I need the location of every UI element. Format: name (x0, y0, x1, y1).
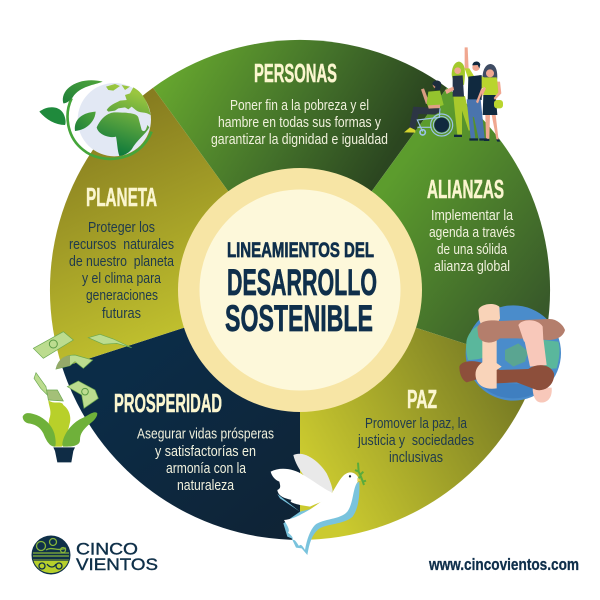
section: Prosperidad (114, 388, 274, 494)
plant right leaf (62, 412, 97, 447)
hand: medium brown arm and fist (477, 319, 565, 343)
wheel: Alianzas wedge (300, 88, 550, 367)
text: Alianzas: agenda a través (429, 225, 515, 241)
dove eye (349, 475, 351, 477)
text: Paz: Promover la paz, la (365, 416, 468, 432)
logo mark (32, 536, 70, 574)
center disc (200, 190, 400, 390)
dove wing (271, 469, 333, 507)
money details (49, 340, 88, 395)
section: Planeta (69, 182, 175, 322)
logo: Cinco Vientos (32, 536, 158, 574)
plant pot (53, 447, 75, 462)
text: Alianzas: de una sólida (437, 242, 508, 258)
text: Planeta: futuras (102, 306, 141, 322)
dove back wing (293, 454, 333, 497)
text: Alianzas: alianza global (434, 259, 510, 275)
leaf: small (75, 112, 96, 131)
text: Paz (357, 416, 474, 466)
section: Personas (211, 58, 388, 148)
text: Planeta: de nuestro planeta (69, 254, 175, 270)
dove body (284, 472, 359, 550)
title: SOSTENIBLE (225, 298, 373, 339)
text: Planeta: Proteger los (88, 220, 155, 236)
title: DESARROLLO (227, 262, 377, 303)
person: man raising arm (465, 47, 487, 141)
hand: pale fist (476, 358, 502, 389)
icon: joined hands over globe (459, 304, 565, 402)
text: Paz: justicia y sociedades (357, 433, 474, 449)
text: Alianzas: Implementar la (431, 208, 514, 224)
logo wordmark: VIENTOS (76, 555, 158, 574)
person: woman with green hair (445, 62, 472, 137)
text: Paz: inclusivas (389, 450, 443, 466)
heading: Paz: PAZ (407, 384, 437, 414)
icon: group of people (404, 47, 503, 142)
title: LINEAMIENTOS DEL (227, 239, 374, 262)
hand: pink arm (524, 338, 552, 402)
icon: globe with leaves (39, 80, 152, 159)
heading: Alianzas: ALIANZAS (427, 174, 504, 204)
wheel: Paz wedge (300, 290, 538, 540)
plant left leaf (23, 413, 56, 447)
text: Prosperidad: naturaleza (177, 478, 235, 494)
wheel: Planeta wedge (50, 88, 300, 367)
dove blue shadow (277, 482, 359, 555)
text: Personas: garantizar la dignidad e igualdad (211, 132, 388, 148)
text: Prosperidad (137, 426, 274, 494)
icon: white dove with olive branch (271, 454, 366, 555)
text: Planeta: y el clima para (82, 271, 162, 287)
wheel: Personas wedge (153, 40, 447, 290)
plant center leaf (48, 400, 70, 447)
text: Planeta (69, 220, 175, 322)
hand: pink fist (518, 320, 543, 342)
text: Prosperidad: Asegurar vidas prósperas (137, 426, 274, 442)
heading: Personas: PERSONAS (254, 58, 337, 88)
money bills (33, 332, 132, 408)
icon: plant and flying money (23, 332, 132, 462)
logo wordmark: CINCO (76, 540, 138, 558)
text: Alianzas (429, 208, 515, 275)
hands globe (466, 305, 561, 401)
person: woman with bag (477, 64, 503, 142)
globe sphere (78, 83, 151, 156)
text: Planeta: recursos naturales (69, 237, 174, 253)
title (225, 239, 377, 339)
text: Prosperidad: armonía con la (166, 461, 247, 477)
heading: Prosperidad: PROSPERIDAD (114, 388, 222, 418)
dove beak (357, 477, 361, 482)
logo wordmark (76, 540, 158, 574)
wheel: Prosperidad wedge (62, 290, 300, 540)
text: Personas: Poner fin a la pobreza y el (230, 98, 369, 114)
text: Personas: hambre en todas sus formas y (218, 115, 382, 131)
globe stem swoop (68, 98, 152, 159)
hand: dark brown arm and fist (459, 361, 554, 390)
section: Paz (357, 384, 474, 466)
center ring (178, 168, 422, 412)
heading: Planeta: PLANETA (86, 182, 157, 212)
person: man in wheelchair (404, 81, 453, 136)
text: Personas (211, 98, 388, 148)
leaf: left (39, 107, 66, 125)
hand: pale vertical arm (478, 304, 500, 367)
leaf: top (63, 80, 103, 103)
section: Alianzas (427, 174, 515, 275)
olive branch (355, 463, 366, 485)
globe Eurasia (106, 84, 151, 115)
globe Africa (97, 112, 149, 156)
text: Prosperidad: y satisfactorías en (155, 444, 256, 460)
text: Planeta: generaciones (86, 288, 158, 304)
